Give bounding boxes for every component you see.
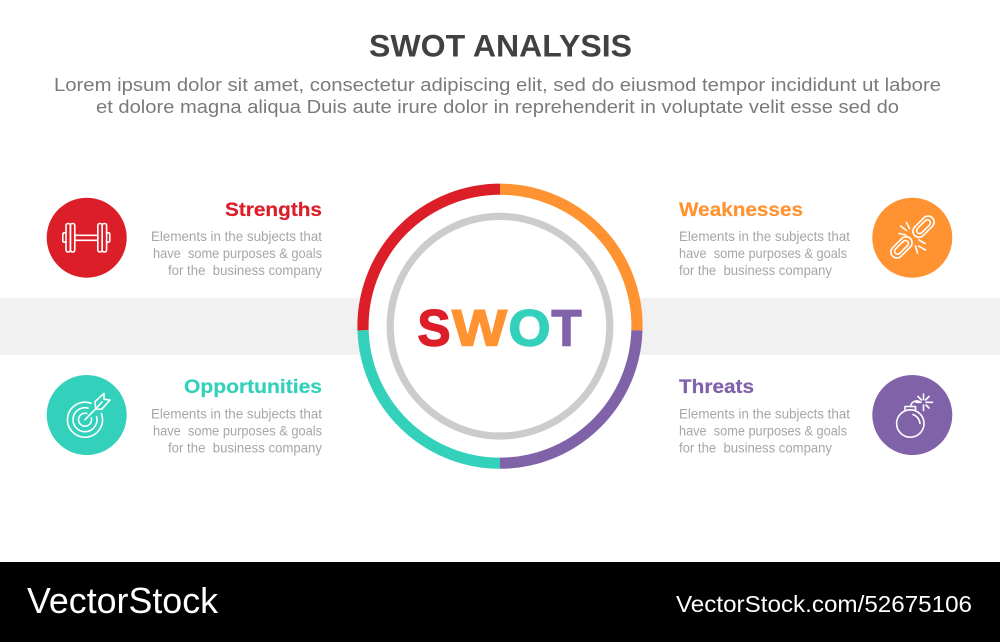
footer image id: VectorStock.com/52675106 bbox=[676, 591, 972, 617]
subtitle text: et dolore magna aliqua Duis aute irure dolor in reprehenderit in voluptate velit esse sed do bbox=[96, 96, 899, 117]
outer ring segment: threats bbox=[500, 330, 637, 463]
heading: weaknesses: Weaknesses bbox=[679, 200, 803, 221]
heading: opportunities: Opportunities bbox=[184, 377, 322, 398]
SWOT wordmark: W bbox=[452, 300, 508, 356]
text: weaknesses description: Elements in the subjects that bbox=[679, 229, 850, 244]
text: threats description: for the business company bbox=[679, 441, 832, 456]
text: opportunities description: have some purposes & goals bbox=[153, 424, 322, 439]
footer logo text: VectorStock bbox=[27, 580, 219, 621]
text: weaknesses description: have some purposes & goals bbox=[679, 246, 847, 261]
grey horizontal band bbox=[0, 298, 1000, 355]
text: strengths description: have some purposes & goals bbox=[153, 246, 322, 261]
outer ring segment: weaknesses bbox=[500, 189, 637, 330]
icon: broken chain link bbox=[872, 198, 952, 278]
SWOT wordmark: S bbox=[418, 300, 450, 356]
text: threats description: have some purposes & goals bbox=[679, 424, 847, 439]
SWOT wordmark: O bbox=[508, 300, 550, 356]
text: opportunities description bbox=[151, 407, 322, 456]
central SWOT ring diagram bbox=[358, 184, 642, 469]
footer bar bbox=[0, 562, 1000, 642]
text: threats description: Elements in the subjects that bbox=[679, 407, 850, 422]
text: strengths description: Elements in the subjects that bbox=[151, 229, 322, 244]
text: opportunities description: for the business company bbox=[168, 441, 322, 456]
panel: opportunities bbox=[47, 375, 322, 456]
outer ring segment: strengths bbox=[363, 189, 500, 330]
text: weaknesses description: for the business company bbox=[679, 263, 832, 278]
heading: strengths: Strengths bbox=[225, 200, 322, 221]
title: SWOT ANALYSIS bbox=[369, 28, 632, 64]
text: weaknesses description bbox=[679, 229, 850, 278]
icon: target with arrow bbox=[47, 375, 127, 455]
SWOT wordmark bbox=[418, 300, 582, 356]
text: threats description bbox=[679, 407, 850, 456]
panel: strengths bbox=[47, 198, 322, 278]
icon: bomb bbox=[872, 375, 952, 455]
outer ring segment: opportunities bbox=[363, 330, 500, 463]
SWOT wordmark: T bbox=[552, 300, 582, 356]
inner grey ring bbox=[390, 216, 610, 436]
heading: threats: Threats bbox=[679, 377, 754, 398]
text: opportunities description: Elements in the subjects that bbox=[151, 407, 322, 422]
panel: weaknesses bbox=[679, 198, 952, 278]
panel: threats bbox=[679, 375, 952, 456]
subtitle text bbox=[54, 74, 941, 117]
icon: dumbbell bbox=[47, 198, 127, 278]
text: strengths description: for the business company bbox=[168, 263, 322, 278]
text: strengths description bbox=[151, 229, 322, 278]
subtitle text: Lorem ipsum dolor sit amet, consectetur adipiscing elit, sed do eiusmod tempor incididunt ut labore bbox=[54, 74, 941, 95]
